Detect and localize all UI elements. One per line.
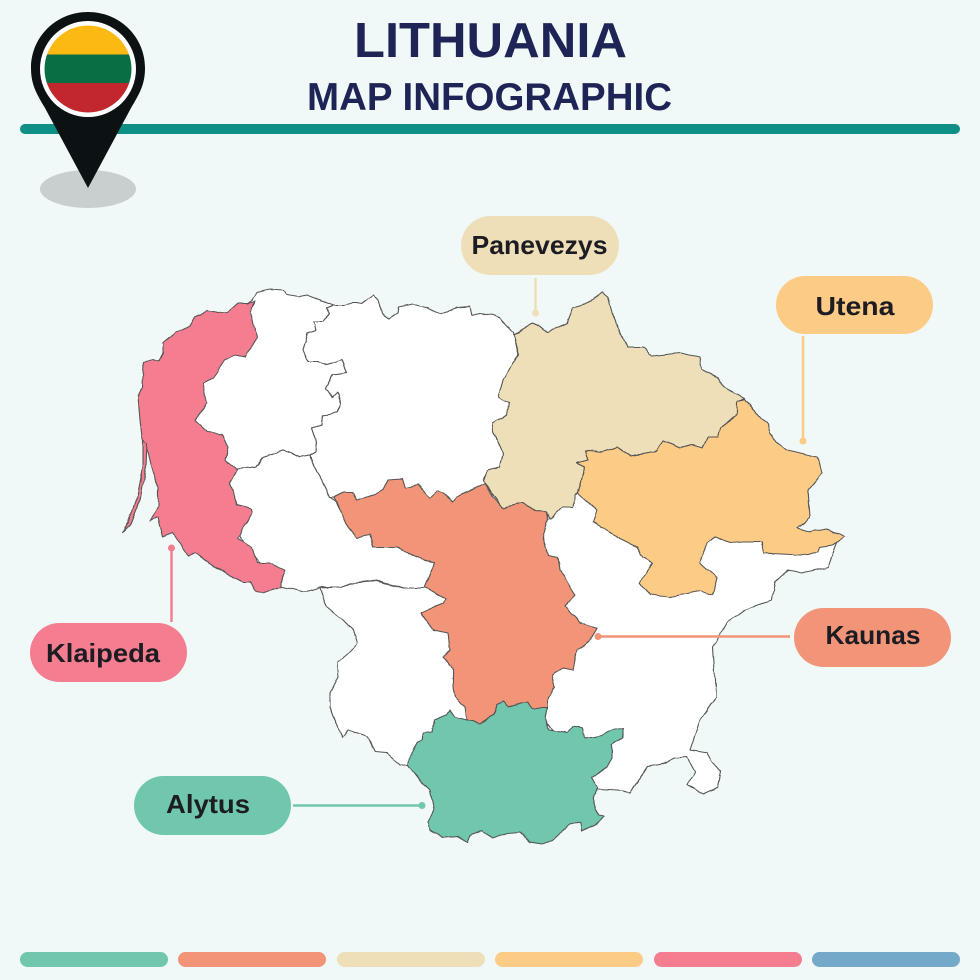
callout: Kaunas: Kaunas <box>826 620 920 650</box>
callout: Utena: Utena <box>816 291 895 321</box>
title: MAP INFOGRAPHIC <box>307 76 672 119</box>
region: Vilnius (white) <box>530 480 837 794</box>
region: Siauliai (white) <box>303 295 530 515</box>
region: Taurage (white) <box>225 450 445 592</box>
callout: Panevezys <box>461 216 619 316</box>
map of Lithuania <box>122 289 845 844</box>
callout: Alytus: Alytus <box>166 789 250 819</box>
callout: Kaunas <box>594 608 951 667</box>
icon: location pin with Lithuanian flag <box>31 12 145 208</box>
callout: Alytus <box>134 776 426 835</box>
callout: Panevezys: Panevezys <box>472 230 608 260</box>
region: Kaunas <box>335 479 597 723</box>
callout: Klaipeda <box>30 544 187 682</box>
region: Telsiai (white) <box>180 289 347 475</box>
region: Klaipeda <box>122 301 285 593</box>
region: Utena <box>577 399 845 597</box>
region: Panevezys <box>483 292 745 519</box>
region: Marijampole (white) <box>320 581 470 765</box>
footer colour bars <box>20 952 960 967</box>
title: LITHUANIA <box>354 14 627 68</box>
callout: Klaipeda: Klaipeda <box>46 638 161 668</box>
title <box>307 14 672 119</box>
header rule <box>20 124 960 134</box>
region: Alytus <box>408 702 624 844</box>
callout: Utena <box>776 276 933 444</box>
